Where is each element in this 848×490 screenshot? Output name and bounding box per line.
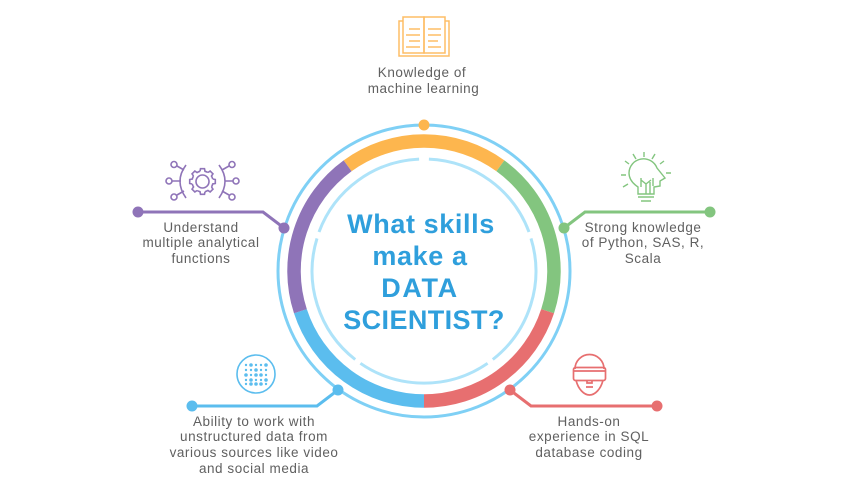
connector: red	[504, 384, 662, 412]
label: unstructured data: and social media	[199, 461, 309, 476]
inner dashed ring	[312, 159, 536, 383]
outer thin ring	[278, 125, 570, 417]
title	[343, 209, 505, 335]
label: programming: Strong knowledge	[585, 220, 701, 235]
label: analytical functions: functions	[172, 251, 230, 266]
label: machine learning: Knowledge of	[378, 65, 466, 80]
title: SCIENTIST?	[343, 305, 505, 335]
label: analytical functions: multiple analytical	[142, 235, 260, 250]
connector: blue	[186, 384, 344, 412]
title: DATA	[381, 273, 459, 303]
label: SQL: experience in SQL	[529, 429, 649, 444]
label: unstructured data	[170, 414, 338, 476]
label: analytical functions: Understand	[163, 220, 239, 235]
icon: gear with circuits	[166, 162, 239, 200]
label: SQL	[529, 414, 649, 460]
connector: green	[558, 206, 716, 234]
label: programming: Scala	[625, 251, 661, 266]
dot grid	[244, 363, 268, 386]
icon: data dots circle	[237, 355, 275, 393]
connector: orange top	[418, 120, 430, 130]
label: SQL: database coding	[535, 445, 643, 460]
label: SQL: Hands-on	[558, 414, 620, 429]
label: machine learning	[368, 65, 479, 96]
label: programming	[582, 220, 704, 266]
connector: purple	[132, 206, 290, 234]
icon: VR headset face	[574, 354, 606, 395]
label: programming: of Python, SAS, R,	[582, 235, 704, 250]
label: unstructured data: unstructured data from	[180, 429, 328, 444]
segment: green	[500, 166, 554, 311]
icon: open book	[399, 17, 449, 56]
label: unstructured data: various sources like video	[170, 445, 338, 460]
segment: orange	[348, 141, 500, 166]
title: make a	[372, 241, 468, 271]
label: machine learning: machine learning	[368, 81, 479, 96]
label: unstructured data: Ability to work with	[193, 414, 315, 429]
icon: light bulb head	[621, 152, 671, 201]
title: What skills	[347, 209, 495, 239]
gear teeth	[190, 169, 215, 194]
segment: red	[424, 311, 548, 401]
segment: blue	[300, 311, 424, 401]
label: analytical functions	[142, 220, 260, 266]
segment: purple	[294, 166, 348, 311]
central ring diagram	[278, 125, 570, 417]
segmented ring	[294, 141, 554, 401]
